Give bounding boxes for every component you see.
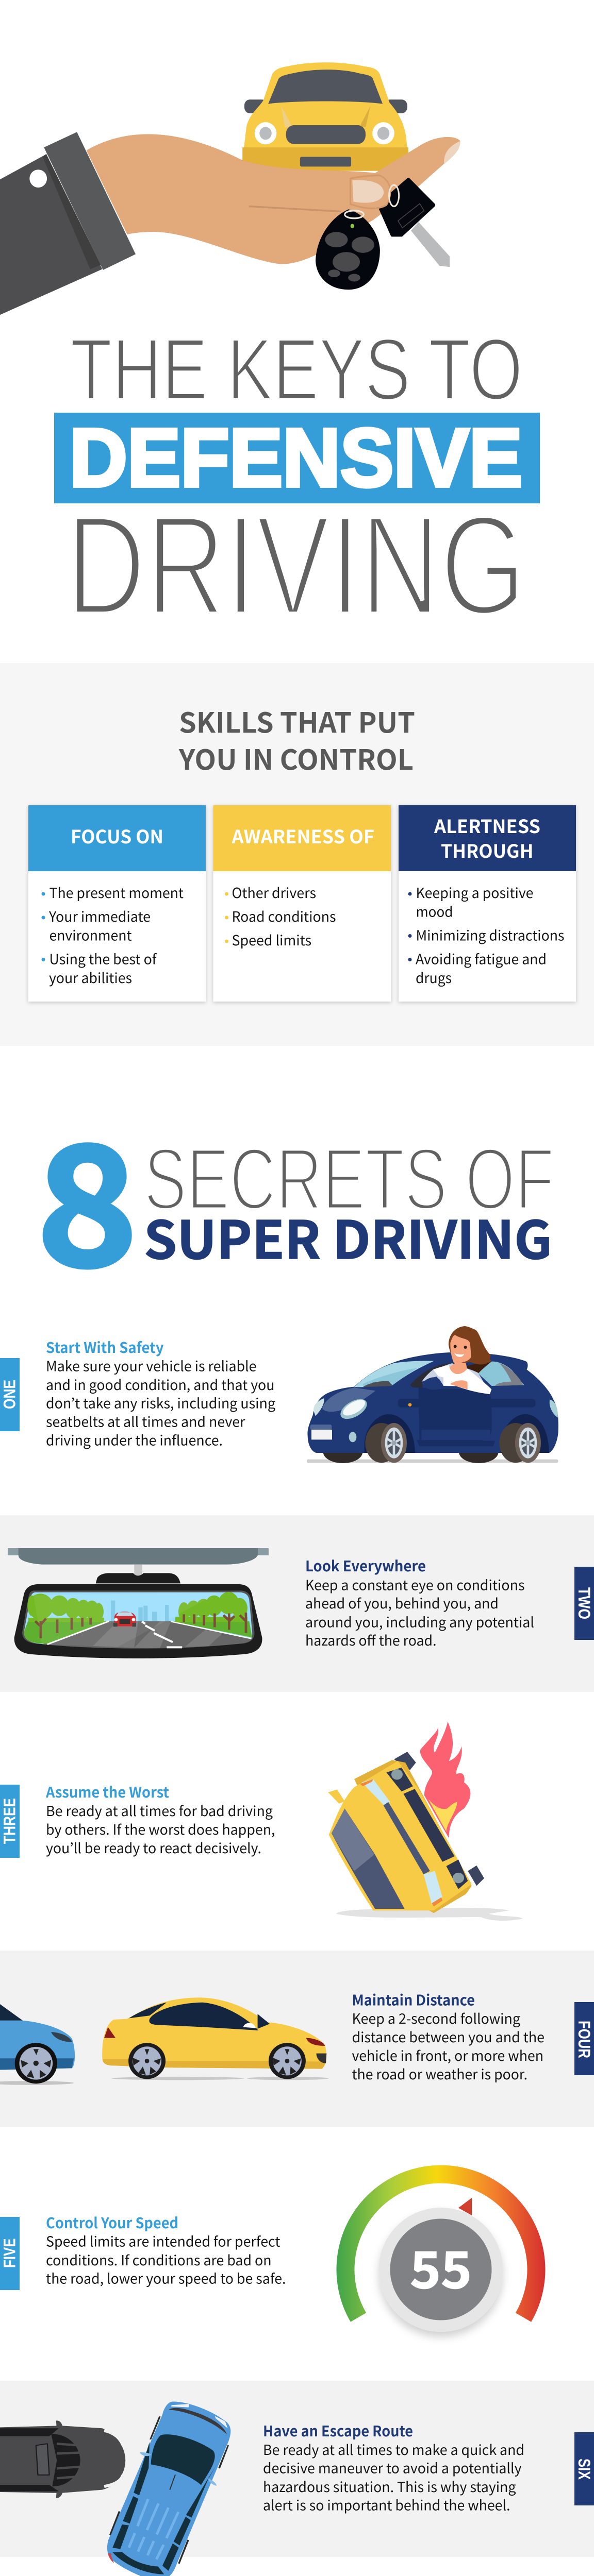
card: focus on: Your immediate: [48, 906, 151, 926]
text: maintain distance: vehicle in front, or more when: [352, 2045, 543, 2065]
card: alertness through: Minimizing distractions: [416, 924, 564, 945]
tab: five: FIVE: [0, 2238, 19, 2268]
text: assume the worst: you’ll be ready to react decisively.: [46, 1837, 261, 1857]
card: focus on: environment: [50, 924, 132, 945]
card: alertness through: drugs: [416, 967, 452, 987]
tab: one: [0, 1358, 20, 1431]
text: start with safety: seatbelts at all times and never: [46, 1411, 245, 1431]
title: The Keys to Defensive Driving: DEFENSIVE: [70, 411, 522, 504]
text: assume the worst: by others. If the worst does happen,: [46, 1819, 275, 1839]
text: maintain distance: Keep a 2-second following: [352, 2008, 520, 2028]
text: control your speed: [46, 2212, 286, 2287]
card: alertness through: Keeping a positive: [416, 882, 533, 902]
text: maintain distance: distance between you and the: [352, 2026, 544, 2046]
card: focus on: [28, 805, 206, 1002]
card: focus on: Using the best of: [50, 948, 157, 969]
text: start with safety: driving under the influence.: [46, 1429, 223, 1450]
tab: five: [0, 2217, 20, 2290]
heading: skills: YOU IN CONTROL: [178, 737, 414, 778]
card: focus on: The present moment: [50, 882, 184, 902]
card: alertness through: ALERTNESS: [434, 812, 540, 839]
card: alertness through: Avoiding fatigue and: [416, 948, 547, 969]
text: look everywhere: Keep a constant eye on conditions: [305, 1574, 525, 1594]
text: start with safety: Start With Safety: [46, 1336, 164, 1358]
tab: four: [574, 2002, 594, 2075]
step two: look everywhere: [0, 1515, 594, 1692]
text: maintain distance: Maintain Distance: [352, 1989, 475, 2010]
text: have an escape route: hazardous situation. This is why staying: [263, 2476, 516, 2496]
text: start with safety: don’t take any risks, including using: [46, 1392, 275, 1413]
text: control your speed: conditions. If conditions are bad on: [46, 2249, 271, 2269]
icon: black car from above: [0, 2420, 125, 2498]
card: awareness of: Road conditions: [232, 906, 336, 926]
icon: suit sleeve: [0, 132, 136, 315]
step six: have an escape route: [0, 2381, 594, 2576]
heading: 8 secrets of super driving: 8: [36, 1073, 138, 1314]
tab: one: ONE: [0, 1380, 19, 1409]
icon: car key and fob: [316, 175, 450, 290]
text: look everywhere: [305, 1555, 534, 1650]
card: awareness of: AWARENESS OF: [231, 822, 374, 849]
icon: speedometer showing 55: [345, 2174, 536, 2332]
heading: skills: [178, 700, 415, 778]
text: control your speed: Speed limits are intended for perfect: [46, 2231, 280, 2250]
text: look everywhere: Look Everywhere: [305, 1555, 426, 1576]
tab: two: TWO: [575, 1587, 593, 1619]
text: look everywhere: ahead of you, behind you, and: [305, 1592, 499, 1613]
text: maintain distance: the road or weather is poor.: [352, 2063, 527, 2083]
card: alertness through: mood: [416, 901, 453, 921]
tab: six: [574, 2432, 594, 2505]
text: maintain distance: [352, 1989, 544, 2083]
text: assume the worst: [45, 1781, 275, 1857]
step one: start with safety: [0, 1326, 558, 1463]
text: have an escape route: Have an Escape Route: [263, 2420, 413, 2441]
text: have an escape route: decisive maneuver to avoid a potentially: [263, 2458, 522, 2477]
text: start with safety: Make sure your vehicle is reliable: [46, 1355, 257, 1376]
card: awareness of: Speed limits: [232, 929, 311, 950]
text: have an escape route: Be ready at all times to make a quick and: [263, 2439, 524, 2459]
icon: overturned car on fire: [328, 1721, 523, 1921]
step four: maintain distance: [0, 1951, 594, 2127]
heading: 8 secrets of super driving: [36, 1073, 554, 1314]
icon: hand: [87, 134, 460, 264]
card: alertness through: THROUGH: [441, 837, 533, 863]
text: look everywhere: around you, including any potential: [305, 1612, 534, 1631]
card: focus on: FOCUS ON: [71, 822, 163, 849]
panel: skills that put you in control: [0, 663, 594, 1046]
text: assume the worst: Assume the Worst: [45, 1781, 169, 1802]
text: look everywhere: hazards off the road.: [305, 1630, 436, 1650]
heading: skills: SKILLS THAT PUT: [179, 700, 415, 741]
title: The Keys to Defensive Driving: [54, 320, 540, 645]
text: control your speed: the road, lower your speed to be safe.: [46, 2268, 286, 2287]
text: start with safety: [46, 1336, 275, 1450]
heading: 8 secrets of super driving: SUPER DRIVING: [144, 1199, 552, 1274]
card: awareness of: [213, 805, 391, 1002]
tab: three: THREE: [0, 1798, 19, 1844]
tab: four: FOUR: [575, 2021, 593, 2058]
step three: assume the worst: [0, 1721, 523, 1921]
hero illustration: hand holding car keys: [0, 62, 460, 315]
text: control your speed: Control Your Speed: [46, 2212, 178, 2233]
icon: yellow car: [242, 62, 408, 171]
text: have an escape route: alert is so important behind the wheel.: [263, 2495, 510, 2514]
text: assume the worst: Be ready at all times for bad driving: [46, 1800, 273, 1820]
icon: rear view mirror: [8, 1548, 269, 1658]
icon: following cars: [0, 1997, 329, 2085]
card: awareness of: Other drivers: [232, 882, 316, 902]
card: alertness through: [399, 805, 576, 1002]
text: start with safety: and in good condition, and that you: [46, 1374, 274, 1394]
card: focus on: your abilities: [49, 967, 132, 987]
text: have an escape route: [263, 2420, 524, 2514]
step five: control your speed: [0, 2174, 536, 2332]
icon: woman driving blue car: [307, 1326, 558, 1463]
title banner: [54, 413, 540, 503]
icon: blue car from above: [107, 2402, 230, 2576]
tab: two: [574, 1567, 594, 1640]
icon: speedometer showing 55: 55: [410, 2230, 472, 2303]
tab: six: SIX: [575, 2459, 593, 2480]
